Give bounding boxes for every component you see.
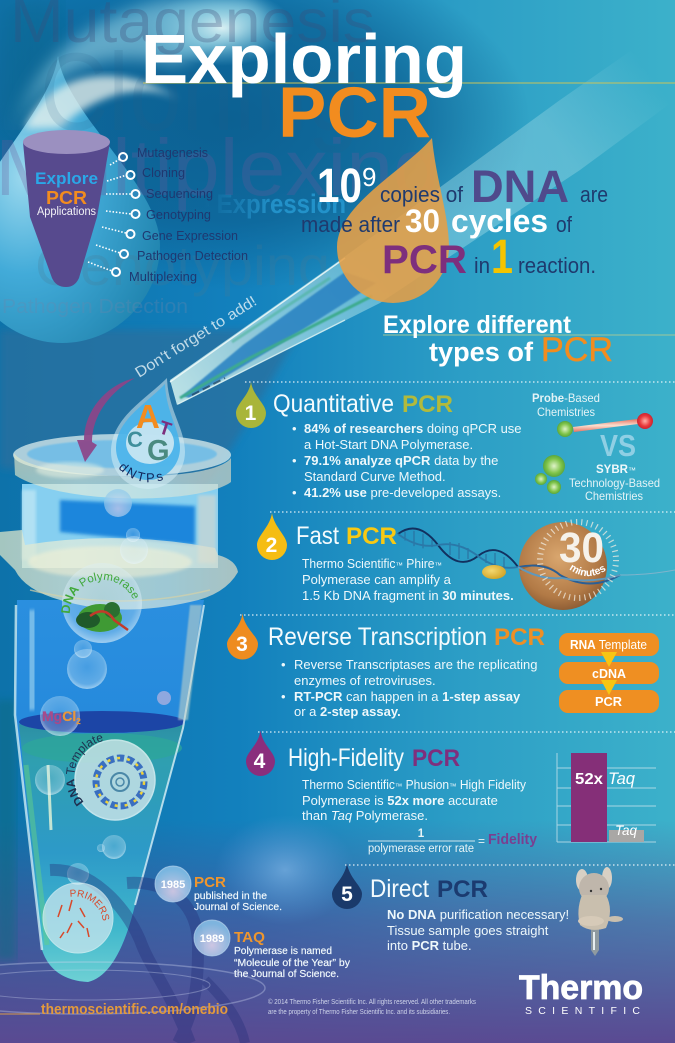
pipette [170, 20, 675, 405]
white glow band [15, 0, 294, 135]
heading: explore different types: Explore different [383, 311, 572, 339]
fidelity formula: Fidelity [488, 832, 537, 848]
purple arrow [77, 378, 135, 462]
application list [88, 146, 248, 284]
bullet list 3: Reverse Transcriptases are the replicating [294, 657, 538, 672]
heading: explore different types: PCR [541, 331, 613, 369]
bullet list 1: 41.2% use pre-developed assays. [304, 485, 501, 500]
drop icon 2 [257, 513, 287, 560]
headline statistic: 9 [362, 162, 376, 192]
section 4: high-fidelity PCR [246, 730, 656, 855]
headline statistic: 1 [491, 231, 513, 284]
workflow flowchart: RNA Template [570, 637, 647, 652]
drop icon 4: 4 [254, 750, 266, 773]
heading 1: PCR [402, 391, 453, 418]
reminder text: Don't forget to add! [132, 293, 260, 381]
section 2: fast PCR [257, 513, 675, 610]
bullet list 1 [292, 421, 522, 500]
headline statistic: in [474, 253, 490, 278]
headline statistic: copies of [380, 182, 464, 207]
drop icon 4 [246, 730, 275, 776]
ingredient: DNA polymerase: DNA Polymerase [61, 572, 138, 614]
bar chart: 52x Taq: Taq [608, 769, 636, 788]
drop icon 3 [227, 613, 258, 660]
heading 2 [296, 522, 397, 550]
application list: Pathogen Detection [137, 249, 248, 263]
fidelity formula: = [478, 834, 485, 848]
timeline: 1985: PCR [194, 874, 226, 891]
drop icon 5: 5 [341, 883, 353, 906]
ghost word: gene expression: Gene Expression [150, 189, 346, 219]
ghost words: applications background: Pathogen Detection [2, 296, 188, 318]
applications tube: PCR [46, 188, 87, 208]
workflow flowchart: PCR [595, 694, 623, 709]
body text 5: Tissue sample goes straight [387, 923, 549, 938]
headline statistic: PCR [382, 238, 467, 282]
bubbles [35, 489, 171, 885]
bar chart: 52x Taq: Taq [615, 822, 637, 838]
ghost words: applications background [0, 0, 440, 318]
heading 4: PCR [412, 745, 460, 772]
applications tube: Explore [35, 169, 98, 188]
drop icon 3: 3 [236, 633, 248, 656]
heading 4: High-Fidelity [288, 744, 404, 772]
ghost words: applications background: Multiplexing [0, 123, 440, 212]
heading 1: Quantitative [273, 390, 394, 418]
section 1: quantitative PCR [236, 382, 660, 503]
section 3: reverse transcription PCR [227, 613, 659, 719]
heading 5 [370, 875, 488, 903]
body text 2: Polymerase can amplify a [302, 572, 452, 587]
heading 2: PCR [346, 523, 397, 550]
application list: Sequencing [146, 187, 213, 201]
application list: Mutagenesis [137, 146, 208, 160]
ingredient: DNA template [66, 735, 156, 821]
fidelity formula: 1 [418, 828, 425, 840]
probe versus SYBR comparison: VS [600, 428, 636, 463]
applications tube [23, 130, 110, 287]
ingredient: primers: PRIMERS [70, 890, 110, 920]
drop icon 2: 2 [266, 534, 277, 557]
bullet list 1: Standard Curve Method. [304, 469, 446, 484]
ingredient: MgCl2: MgCl [42, 708, 76, 724]
bullet list 3: or a 2-step assay. [294, 704, 401, 719]
heading 5: PCR [437, 876, 488, 903]
body text 4: Polymerase is 52x more accurate [302, 793, 498, 808]
heading 2: Fast [296, 522, 339, 550]
fidelity formula: polymerase error rate [368, 843, 474, 855]
ingredient: primers [42, 882, 114, 954]
body text 2: Thermo Scientific™ Phire™ [302, 556, 442, 571]
application list: Cloning [142, 166, 185, 180]
timeline: 1989: TAQ [234, 929, 265, 946]
probe versus SYBR comparison: Chemistries [537, 405, 595, 419]
body text 5: into PCR tube. [387, 938, 472, 953]
application list: Gene Expression [142, 229, 238, 243]
drop icon 1: 1 [245, 402, 257, 425]
bullet list 1: 79.1% analyze qPCR data by the [304, 453, 498, 468]
headline statistic: DNA [471, 161, 569, 212]
probe versus SYBR comparison: SYBR™ [596, 464, 636, 476]
probe versus SYBR comparison: Probe-Based [532, 391, 600, 405]
title: Exploring [141, 20, 467, 98]
ghost words: applications background: Genotyping [35, 234, 330, 297]
application list: Multiplexing [129, 270, 197, 284]
probe versus SYBR comparison: Technology-Based [569, 476, 660, 490]
ingredient: dNTPs drop: C [127, 427, 143, 452]
heading 5: Direct [370, 875, 429, 903]
timeline: 1989: “Molecule of the Year” by [234, 958, 350, 969]
bar chart: 52x Taq: 52x [575, 771, 603, 788]
headline statistic: reaction. [518, 253, 596, 278]
applications tube: Applications [37, 206, 96, 218]
title: PCR [278, 74, 431, 153]
bullet list 1: • [292, 453, 297, 468]
stopwatch ball and DNA helix: 30 [559, 524, 604, 572]
body text 2 [302, 556, 514, 603]
heading: explore different types [383, 311, 675, 369]
bullet list 1: • [292, 485, 297, 500]
headline statistic [301, 160, 608, 284]
drop icon 1 [236, 382, 266, 428]
icon: mouse [576, 867, 623, 956]
copyright: © 2014 Thermo Fisher Scientific Inc. All rights reserved. All other trademarks [268, 998, 476, 1006]
DNA helix silhouette [50, 870, 245, 1043]
bullet list 3: • [281, 689, 286, 704]
bullet list 3 [281, 657, 538, 719]
bullet list 3: enzymes of retroviruses. [294, 673, 436, 688]
copyright: are the property of Thermo Fisher Scientific Inc. and its subsidiaries. [268, 1009, 450, 1016]
ingredient: DNA template: DNA Template [66, 735, 103, 806]
bullet list 1: • [292, 421, 297, 436]
copyright [268, 998, 476, 1016]
heading: explore different types: types of [429, 337, 534, 367]
bullet list 3: RT-PCR can happen in a 1-step assay [294, 689, 521, 704]
stopwatch ball and DNA helix [398, 519, 675, 610]
timeline: 1985: published in the [194, 891, 267, 902]
ingredient: MgCl2: 2 [76, 717, 81, 726]
body text 5 [387, 907, 569, 953]
timeline: 1985: Journal of Science. [194, 902, 282, 913]
Thermo Scientific logo: SCIENTIFIC [525, 1005, 640, 1017]
headline statistic: are [580, 182, 608, 207]
ingredient: dNTPs drop: dNTPs [119, 464, 163, 482]
stopwatch ball and DNA helix: minutes [570, 564, 606, 576]
timeline: 1985 [155, 866, 282, 913]
fidelity formula [368, 828, 537, 855]
body text 4: than Taq Polymerase. [302, 808, 428, 823]
section 5: direct PCR [332, 863, 623, 956]
probe versus SYBR comparison: Chemistries [585, 489, 643, 503]
probe versus SYBR comparison [532, 391, 660, 503]
ghost words: applications background: Cloning [40, 31, 360, 154]
timeline: 1989: Polymerase is named [234, 946, 332, 957]
timeline: 1985: 1985 [161, 879, 185, 891]
application list: Genotyping [146, 208, 211, 222]
ingredient: dNTPs drop: T [156, 417, 174, 441]
ingredient: MgCl2 [40, 696, 81, 736]
body text 2: 1.5 Kb DNA fragment in 30 minutes. [302, 588, 514, 603]
bullet list 1: 84% of researchers doing qPCR use [304, 421, 522, 436]
headline statistic: made after [301, 212, 400, 237]
orange drop [337, 138, 449, 303]
workflow flowchart: cDNA [592, 666, 627, 681]
bullet list 3: • [281, 657, 286, 672]
ingredient: DNA polymerase [61, 563, 142, 643]
headline statistic: cycles [451, 203, 548, 239]
body text 5: No DNA purification necessary! [387, 907, 569, 922]
heading 3: Reverse Transcription [268, 623, 487, 651]
dotted section dividers [240, 382, 675, 865]
PCR tube [0, 434, 238, 982]
bullet list 1: a Hot-Start DNA Polymerase. [304, 437, 473, 452]
Thermo Scientific logo: Thermo [519, 969, 643, 1007]
website link: thermoscientific.com/onebio [41, 1001, 228, 1018]
ingredient: dNTPs drop: A [136, 398, 160, 435]
headline statistic: 10 [317, 160, 362, 213]
headline statistic: of [556, 212, 573, 237]
bar chart: 52x Taq [557, 753, 656, 842]
ingredient: dNTPs drop [111, 378, 185, 489]
heading 3: PCR [494, 624, 545, 651]
body text 4 [302, 777, 526, 823]
timeline: 1989: 1989 [200, 933, 224, 945]
timeline: 1989: the Journal of Science. [234, 969, 339, 980]
headline statistic: 30 [405, 203, 440, 239]
title [141, 20, 675, 153]
ingredient: dNTPs drop: G [147, 435, 170, 467]
workflow flowchart [559, 633, 659, 713]
large pale drop behind applications [0, 56, 160, 343]
body text 4: Thermo Scientific™ Phusion™ High Fidelity [302, 777, 526, 792]
platform ring [0, 962, 265, 1014]
drop icon 5 [332, 863, 362, 909]
timeline: 1989 [194, 920, 350, 980]
